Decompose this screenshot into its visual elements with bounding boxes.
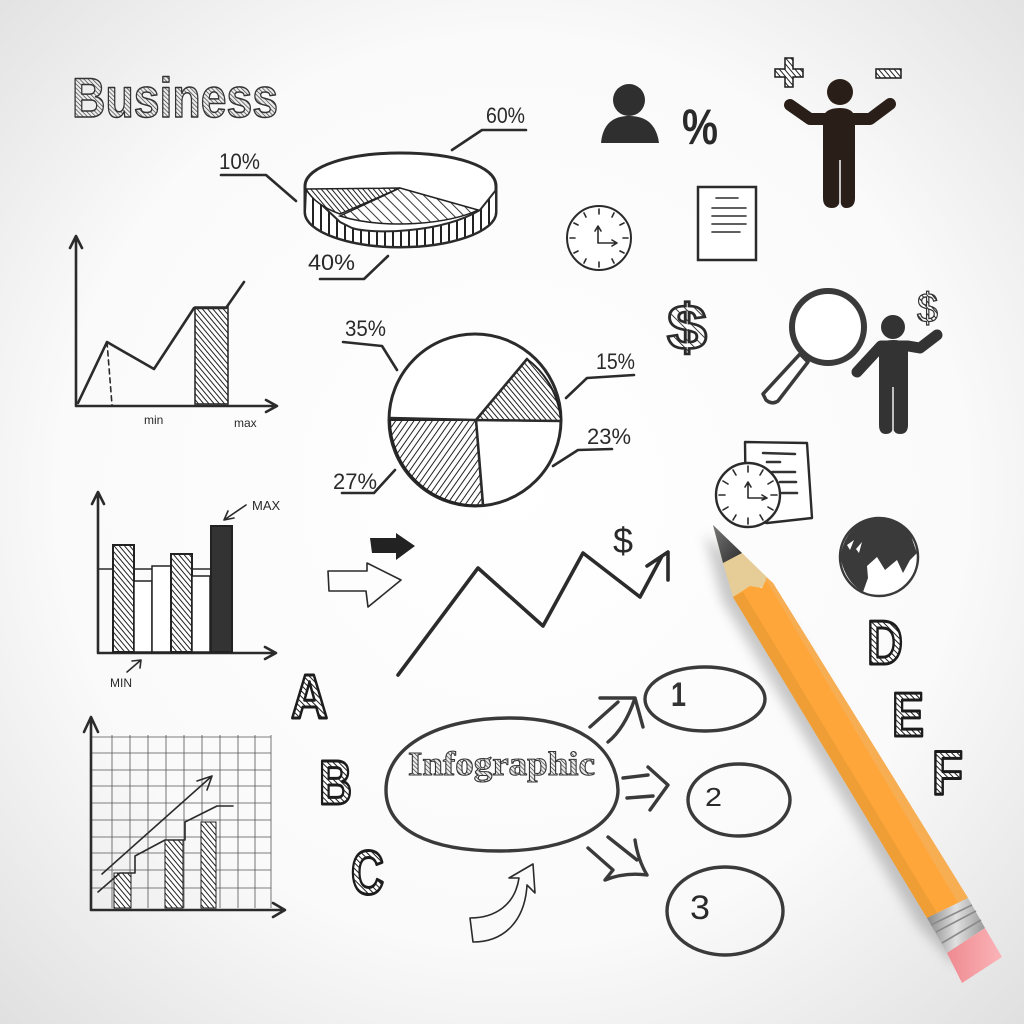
- bar chart with MAX and MIN: MAX: [252, 498, 280, 513]
- label: 60%: [452, 103, 526, 150]
- infographic diagram: 1: [671, 676, 686, 714]
- grid chart: [84, 717, 285, 917]
- label: 10%: 10%: [219, 149, 260, 174]
- letters D E F: [867, 609, 963, 808]
- label: 60%: 60%: [486, 103, 525, 128]
- line chart with min and max: max: [234, 416, 257, 430]
- infographic diagram: 2: [705, 782, 722, 812]
- letters D E F: E: [892, 681, 924, 750]
- person with plus and minus: [775, 58, 901, 208]
- person with percent: [601, 84, 718, 155]
- magnifier and person: [763, 284, 938, 434]
- letters A B C: [291, 663, 384, 908]
- zigzag arrow: [398, 552, 668, 675]
- arrow: outline: [328, 563, 401, 607]
- dollar sign: $: [613, 520, 633, 561]
- label: 27%: 27%: [333, 469, 377, 494]
- label: 40%: [308, 250, 388, 279]
- large pie chart: [389, 334, 561, 506]
- label: 35%: [343, 316, 397, 370]
- letters D E F: F: [932, 739, 963, 808]
- arrow: black: [370, 533, 415, 560]
- dollar icon: $: [667, 291, 707, 363]
- label: 23%: [553, 424, 631, 466]
- globe: [840, 518, 918, 596]
- clock and document: [716, 442, 812, 527]
- infographic diagram: 3: [690, 889, 710, 927]
- letters A B C: C: [351, 839, 384, 908]
- bar chart with MAX and MIN: MIN: [110, 676, 132, 690]
- pencil: [705, 525, 1002, 983]
- person with percent: %: [682, 99, 718, 155]
- letters D E F: D: [867, 609, 903, 678]
- clock: [567, 206, 631, 270]
- magnifier and person: $: [917, 284, 938, 331]
- infographic diagram: [386, 667, 790, 955]
- letters A B C: A: [291, 663, 328, 732]
- label: 15%: [566, 349, 635, 398]
- letters A B C: B: [319, 749, 352, 818]
- label: 23%: 23%: [587, 424, 631, 449]
- label: 10%: [219, 149, 296, 201]
- infographic diagram: Infographic: [408, 746, 595, 783]
- label: 35%: 35%: [345, 316, 386, 341]
- title: Business: Business: [72, 66, 278, 129]
- document: [698, 187, 756, 260]
- 3D pie chart: [305, 153, 496, 247]
- bar chart with MAX and MIN: [92, 492, 280, 690]
- label: 40%: 40%: [308, 250, 355, 275]
- line chart with min and max: min: [144, 413, 163, 427]
- label: 15%: 15%: [596, 349, 635, 374]
- line chart with min and max: [70, 236, 277, 430]
